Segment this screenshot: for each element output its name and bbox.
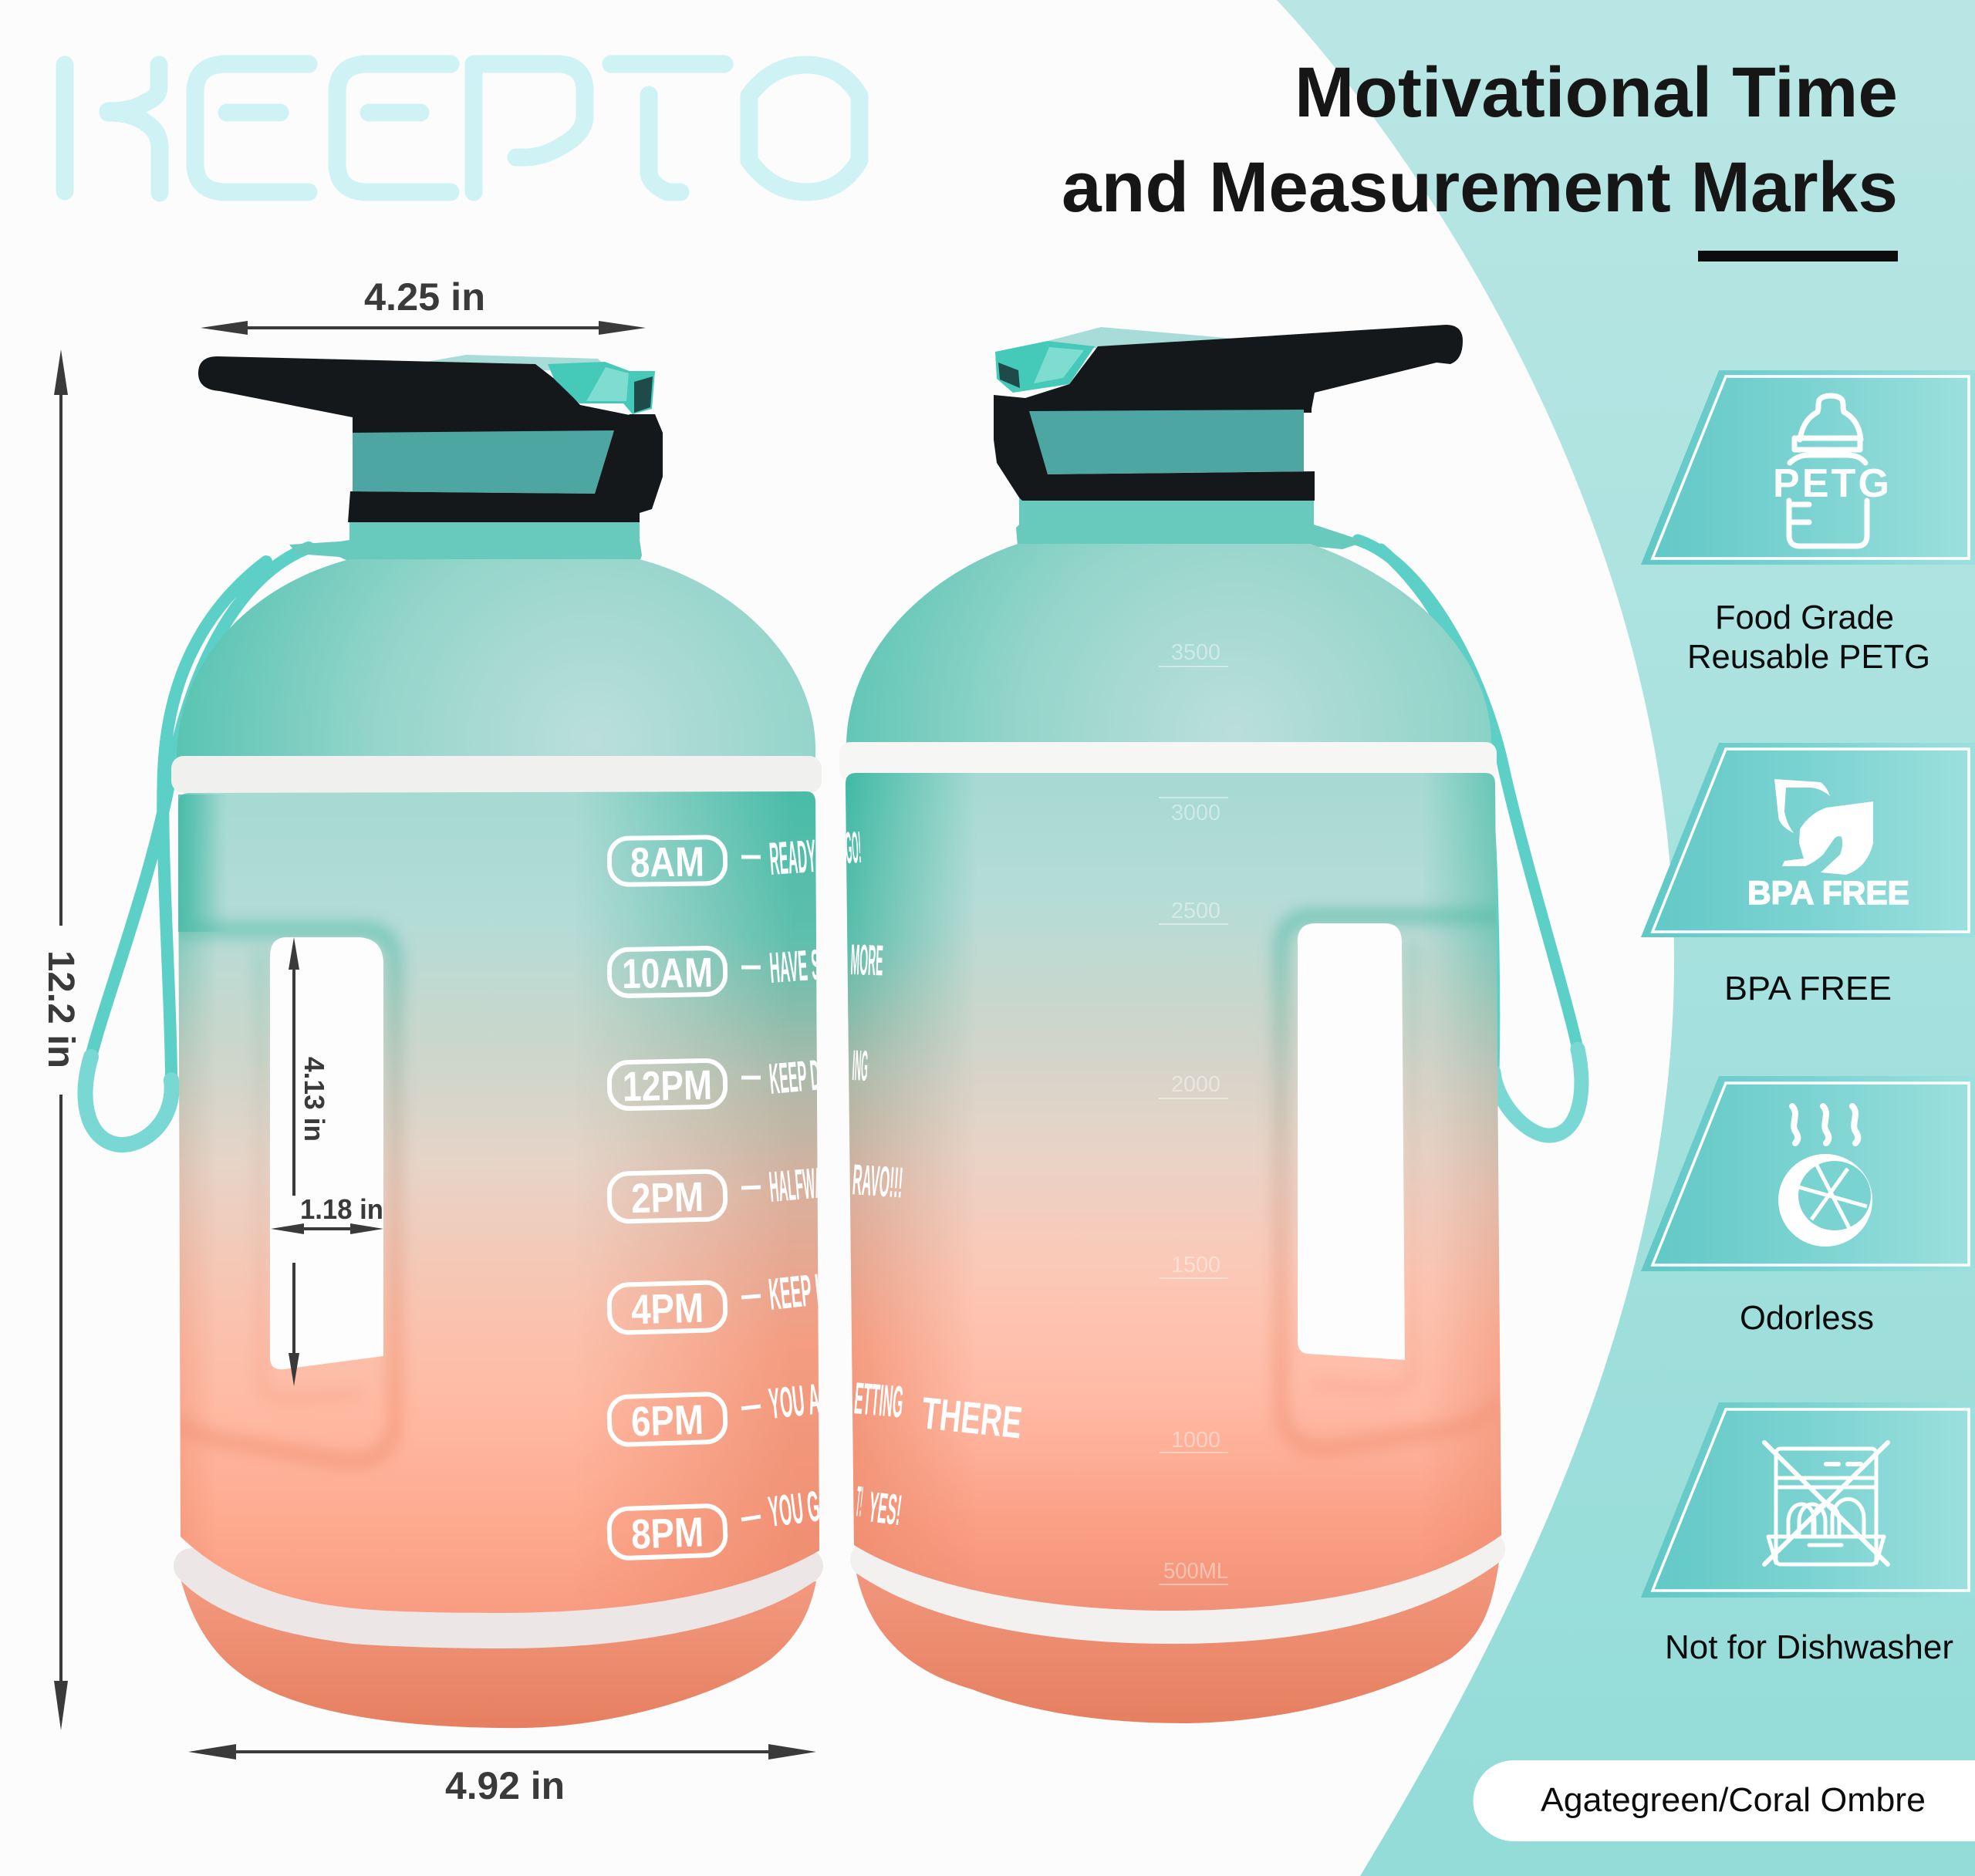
left lid clear dome xyxy=(422,355,609,370)
right bottle measurement marks: 500ML xyxy=(1163,1559,1228,1584)
heading: Motivational Time and Measurement Marks: Motivational Time xyxy=(1295,53,1898,132)
right bottle lower ring xyxy=(868,1549,1487,1626)
time pill: 12PM: 12PM xyxy=(622,1062,713,1110)
icon: PETG baby bottle xyxy=(1773,396,1889,546)
right bottle motivational phrases xyxy=(844,822,1025,1534)
right bottle motivational phrases: ETTING xyxy=(852,1373,905,1427)
left bottle xyxy=(85,355,849,1728)
label: Not for Dishwasher: Not for Dishwasher xyxy=(1665,1629,1953,1666)
left bottle body xyxy=(178,791,819,1613)
color name pill: Agategreen/Coral Ombre xyxy=(1541,1782,1926,1819)
heading underline xyxy=(1698,251,1898,261)
time pill: 6PM: 6PM xyxy=(630,1397,704,1445)
panel shape xyxy=(1641,1076,1975,1271)
left lid lower ring xyxy=(348,414,663,522)
right bottle motivational phrases: YES! xyxy=(866,1482,904,1534)
right lid spout facet xyxy=(1034,347,1084,383)
infographic canvas: KEEP D xyxy=(768,1050,822,1103)
right bottle motivational phrases: ING xyxy=(851,1041,869,1090)
right bottle measurement marks: 3000 xyxy=(1171,801,1220,825)
right lid teal spout xyxy=(995,341,1095,393)
panel white outline xyxy=(1653,1083,1969,1265)
dimension: 4.92 in xyxy=(188,1744,816,1807)
panel shape xyxy=(1641,1402,1975,1598)
right bottle lid xyxy=(994,325,1463,501)
label: Food Grade Reusable PETG: Food Grade xyxy=(1715,599,1894,636)
left lid handle xyxy=(198,356,630,434)
time pill: 8PM xyxy=(609,1505,726,1559)
right lid handle xyxy=(1025,325,1463,413)
right bottle motivational phrases: GO! xyxy=(844,822,863,873)
right bottle measurement marks xyxy=(1159,640,1228,1584)
right bottle white ring xyxy=(839,742,1497,781)
heading: Motivational Time and Measurement Marks: and Measurement Marks xyxy=(1062,148,1898,227)
left bottle motivational phrases xyxy=(767,839,819,1526)
right bottle neck and flange xyxy=(1016,498,1366,549)
color name pill xyxy=(1474,1760,1975,1841)
left bottle handle recess xyxy=(174,930,395,1462)
panel: food grade PETG xyxy=(1641,370,1975,565)
label: Food Grade Reusable PETG xyxy=(1687,599,1930,676)
right bottle dome xyxy=(846,544,1491,748)
time pill: 4PM: 4PM xyxy=(630,1285,704,1333)
dimension: 4.25 in xyxy=(201,275,646,335)
panel: odorless xyxy=(1641,1076,1975,1271)
heading: Motivational Time and Measurement Marks xyxy=(1062,53,1898,227)
left bottle lower ring xyxy=(191,1566,805,1631)
right bottle body edge shading xyxy=(846,773,1501,1583)
left bottle base xyxy=(181,1581,816,1728)
right bottle measurement marks: 1500 xyxy=(1171,1253,1220,1277)
infographic canvas: HALFWA xyxy=(768,1158,825,1211)
right lid teal band xyxy=(1028,410,1304,474)
right bottle xyxy=(833,325,1582,1723)
time pill: 2PM xyxy=(609,1171,726,1223)
label: BPA FREE: BPA FREE xyxy=(1724,970,1892,1007)
left bottle: HAVE S xyxy=(768,940,822,992)
right bottle motivational phrases: MORE xyxy=(850,935,884,984)
left bottle handle hole xyxy=(270,937,383,1369)
icon: steam and citrus slice xyxy=(1778,1106,1872,1247)
left lid spout facet xyxy=(586,367,629,401)
panel: not for dishwasher xyxy=(1641,1402,1975,1598)
left bottle: YOU A xyxy=(767,1374,822,1428)
left lid spout dark window xyxy=(634,376,653,413)
panel white outline xyxy=(1653,1409,1969,1591)
panel: BPA free xyxy=(1641,743,1975,937)
right lid lower ring and clip xyxy=(994,395,1315,501)
right bottle strap xyxy=(1358,540,1582,1135)
panel shape xyxy=(1641,370,1975,565)
dimension: 1.18 in xyxy=(271,1193,383,1234)
panel white outline xyxy=(1653,749,1969,932)
left bottle time marks xyxy=(609,837,726,1559)
label: Food Grade Reusable PETG: Reusable PETG xyxy=(1687,639,1930,676)
label: Odorless: Odorless xyxy=(1740,1300,1874,1337)
right bottle measurement marks: 2000 xyxy=(1171,1072,1220,1097)
panel white outline xyxy=(1653,376,1969,558)
time pill: 2PM: 2PM xyxy=(630,1174,704,1222)
right lid clear dome xyxy=(1048,327,1234,349)
right bottle measurement marks: 1000 xyxy=(1171,1428,1220,1453)
left bottle: YOU G xyxy=(766,1481,822,1536)
dimension: 12.2 in: 12.2 in xyxy=(40,950,81,1068)
left bottle dome xyxy=(177,559,815,757)
left bottle: KEEP I xyxy=(767,1264,822,1320)
left bottle neck and flange xyxy=(289,517,642,562)
right lid spout dark window xyxy=(998,363,1020,388)
time pill: 8PM: 8PM xyxy=(630,1509,704,1558)
infographic canvas: READY xyxy=(768,830,818,885)
left bottle white ring xyxy=(171,756,822,793)
right bottle motivational phrases: THERE xyxy=(920,1388,1025,1449)
BPA FREE icon text: BPA FREE xyxy=(1747,875,1909,912)
time pill: 4PM xyxy=(609,1282,726,1334)
panel shape xyxy=(1641,743,1975,937)
left bottle lid xyxy=(198,355,663,522)
right bottle measurement marks: 2500 xyxy=(1171,899,1220,923)
teal curved background panel xyxy=(1277,0,1975,1876)
dimension: 4.13 in xyxy=(289,937,330,1386)
logo: KEEPTO xyxy=(65,64,859,193)
left bottle body edge shading xyxy=(178,791,819,1606)
right bottle handle hole xyxy=(1298,923,1405,1360)
dimension: 12.2 in xyxy=(40,349,81,1730)
icon: leaf xyxy=(1774,779,1873,875)
dimension: 4.25 in: 4.25 in xyxy=(364,275,485,319)
right bottle motivational phrases: RAVO!!! xyxy=(851,1155,904,1207)
right bottle base xyxy=(856,1550,1501,1723)
dimension: 1.18 in: 1.18 in xyxy=(300,1193,383,1225)
left bottle strap xyxy=(85,548,309,1145)
left bottle dashes xyxy=(741,857,761,1520)
right bottle body xyxy=(846,773,1501,1611)
right bottle handle recess xyxy=(1281,916,1504,1449)
left lid teal spout xyxy=(548,362,655,414)
icon: crossed dishwasher xyxy=(1764,1442,1888,1564)
time pill: 8AM: 8AM xyxy=(630,838,704,886)
left bottle upper edge shade xyxy=(178,795,228,932)
time pill: 10AM: 10AM xyxy=(622,950,714,997)
time pill: 6PM xyxy=(609,1394,726,1446)
right bottle motivational phrases: T! xyxy=(854,1476,865,1526)
left lid teal band xyxy=(353,430,614,494)
dimension: 4.92 in: 4.92 in xyxy=(445,1764,565,1807)
right bottle measurement marks: 3500 xyxy=(1171,640,1220,665)
dimension: 4.13 in: 4.13 in xyxy=(299,1057,330,1142)
icon: PETG baby bottle: PETG xyxy=(1773,461,1889,506)
